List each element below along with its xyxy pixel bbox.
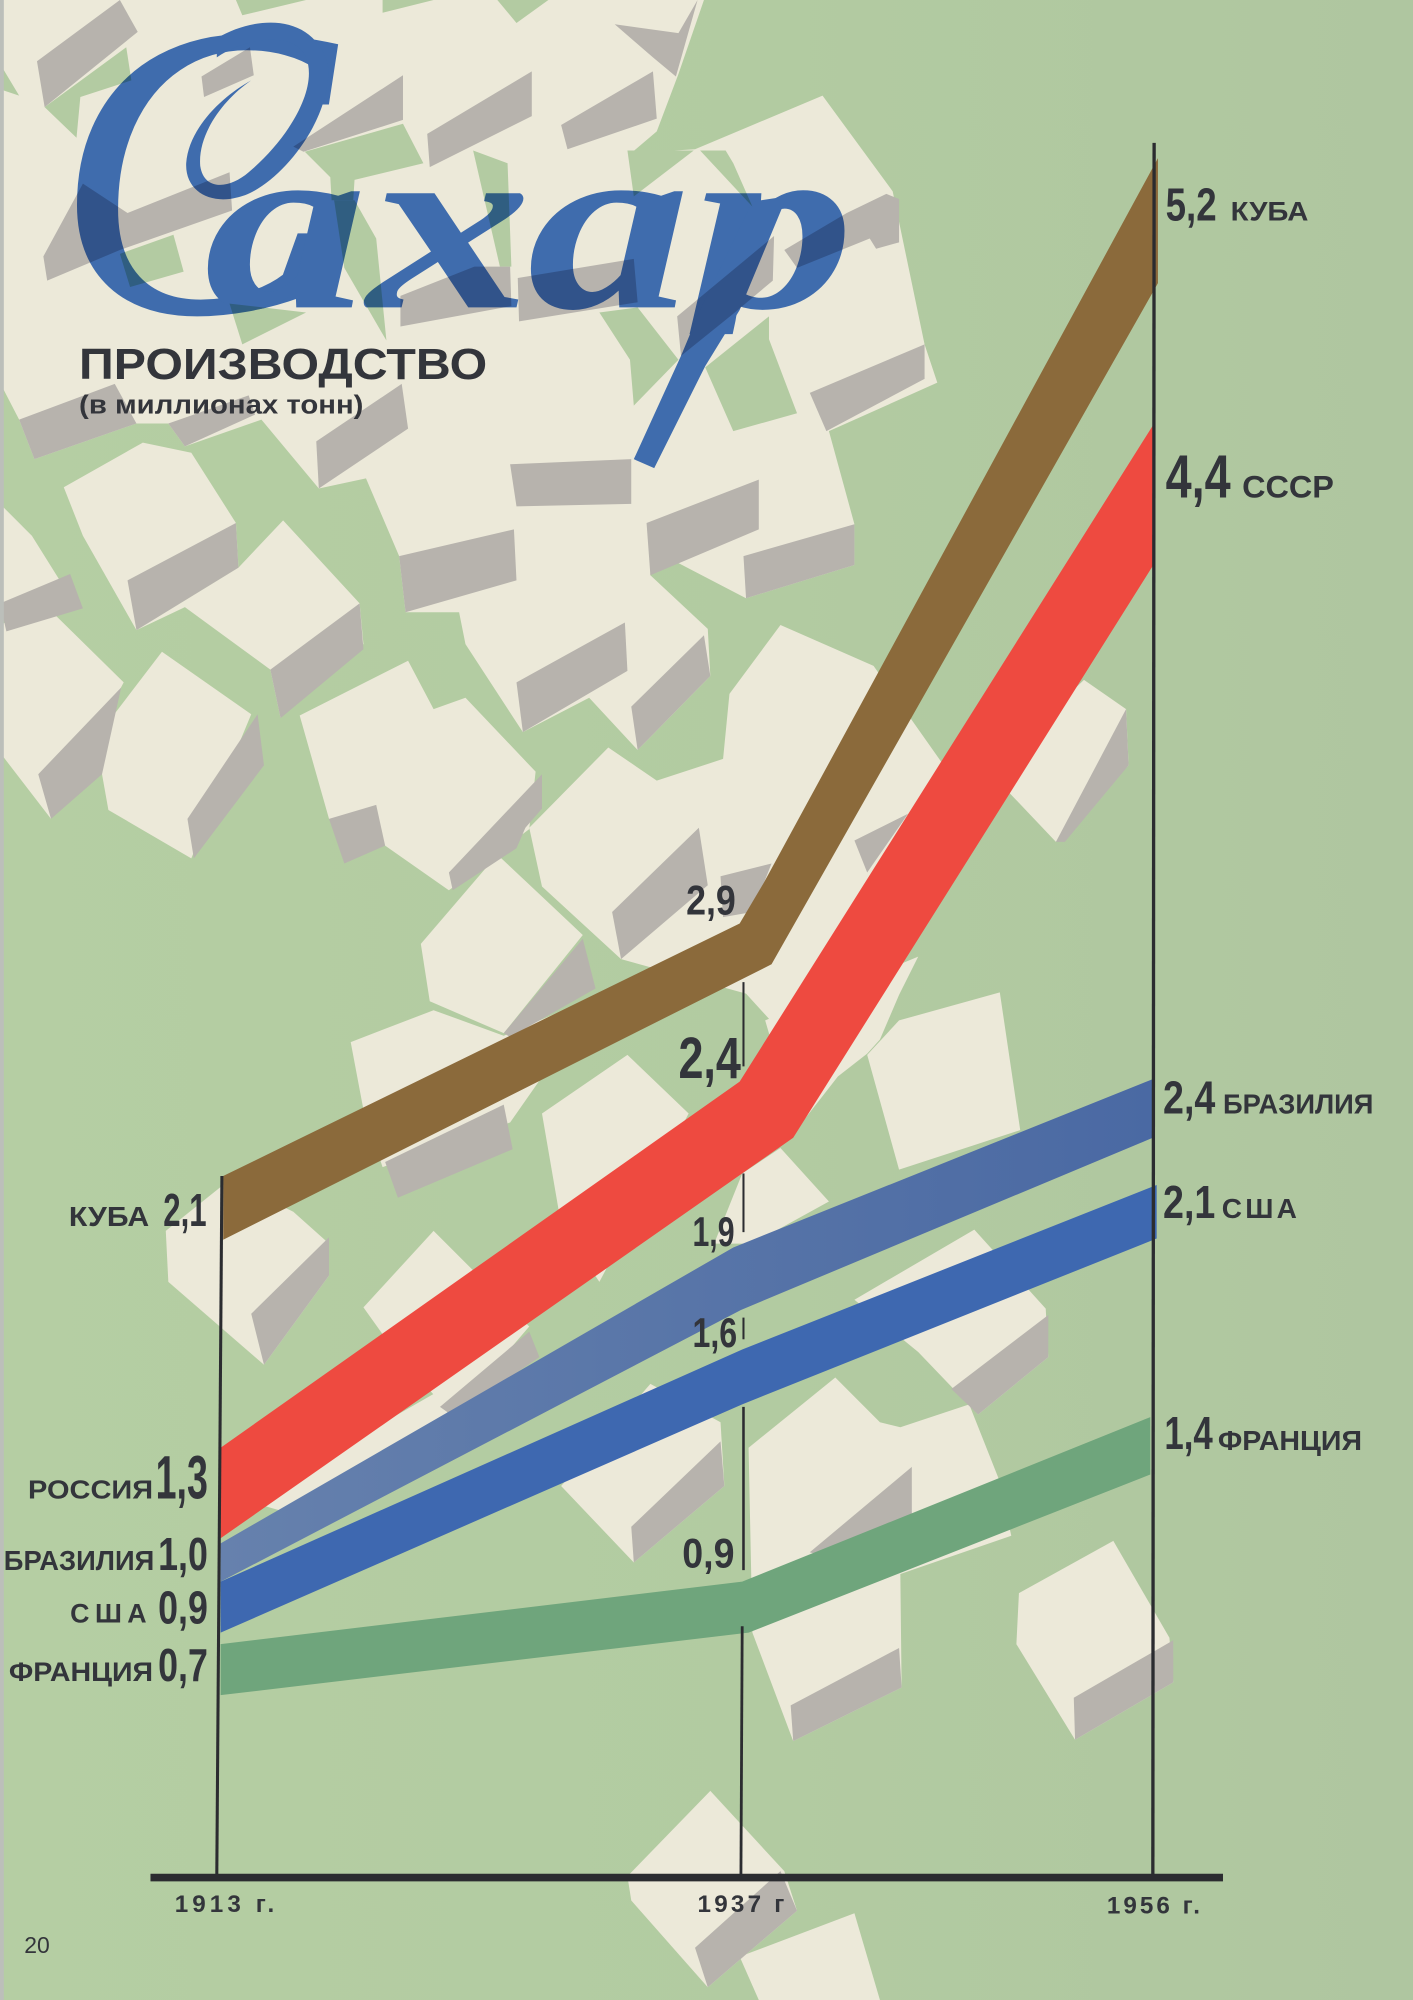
1937 values: 2,4 [678, 1026, 741, 1091]
label: Россия 1913: 1,3 [156, 1444, 208, 1512]
title: Сахар [54, 0, 854, 468]
page number: 20 [24, 1932, 50, 1958]
label: США 1913: 0,9 [158, 1582, 208, 1634]
label: Бразилия 1913: БРАЗИЛИЯ [4, 1545, 154, 1576]
label: США 1913: США [70, 1598, 147, 1628]
1937 values: 0,9 [682, 1530, 735, 1577]
label: Бразилия 1956: БРАЗИЛИЯ [1223, 1089, 1373, 1120]
label: Бразилия 1913: 1,0 [158, 1528, 208, 1580]
title: Сахар: ахар [204, 85, 854, 361]
label: Франция 1913 [9, 1639, 208, 1691]
green gaps [0, 0, 797, 431]
label: Франция 1913: 0,7 [158, 1639, 208, 1691]
label: Куба 1956 [1166, 179, 1308, 231]
band: Бразилия [221, 1079, 1153, 1582]
year labels: 1913 г. [175, 1891, 274, 1918]
label: СССР 1956 [1166, 442, 1334, 510]
band: Франция [221, 1417, 1150, 1695]
label: Россия 1913: РОССИЯ [28, 1477, 153, 1505]
label: Франция 1956: 1,4 [1164, 1407, 1213, 1459]
chart axes [150, 143, 1223, 1878]
label: Бразилия 1913 [4, 1528, 208, 1580]
title flourish: descender of the last letter [634, 196, 787, 468]
label: США 1956: США [1222, 1193, 1297, 1224]
left page edge [0, 0, 4, 2000]
label: Бразилия 1956 [1163, 1072, 1373, 1124]
label: Франция 1913: ФРАНЦИЯ [9, 1657, 153, 1687]
label: США 1956 [1163, 1176, 1297, 1228]
label: Бразилия 1956: 2,4 [1163, 1072, 1216, 1124]
year labels [175, 1891, 1200, 1919]
year labels: 1956 г. [1107, 1892, 1200, 1919]
label: Куба 1956: КУБА [1231, 197, 1308, 227]
label: Куба 1913: 2,1 [163, 1184, 207, 1236]
label: СССР 1956: СССР [1242, 468, 1334, 504]
label: СССР 1956: 4,4 [1166, 442, 1231, 510]
1937 values: 2,9 [686, 877, 736, 924]
label: Франция 1956 [1164, 1407, 1362, 1459]
label: США 1913 [70, 1582, 208, 1634]
title flourish: loop of the capital letter [186, 23, 328, 199]
label: США 1956: 2,1 [1163, 1176, 1215, 1228]
label: Куба 1913 [69, 1184, 207, 1236]
unit note: (в миллионах тонн) [79, 391, 363, 419]
label: Куба 1956: 5,2 [1166, 179, 1217, 231]
label: Куба 1913: КУБА [69, 1201, 149, 1232]
1937 values: 1,9 [692, 1208, 735, 1255]
1937 values: 1,6 [692, 1309, 737, 1356]
subtitle: ПРОИЗВОДСТВО [79, 341, 487, 389]
label: Россия 1913 [28, 1444, 208, 1512]
band: США [221, 1185, 1157, 1633]
band: Куба [223, 158, 1158, 1240]
1937 values [678, 877, 741, 1577]
year labels: 1937 г [698, 1891, 784, 1918]
band: Россия / СССР [221, 423, 1154, 1538]
label: Франция 1956: ФРАНЦИЯ [1218, 1425, 1362, 1456]
